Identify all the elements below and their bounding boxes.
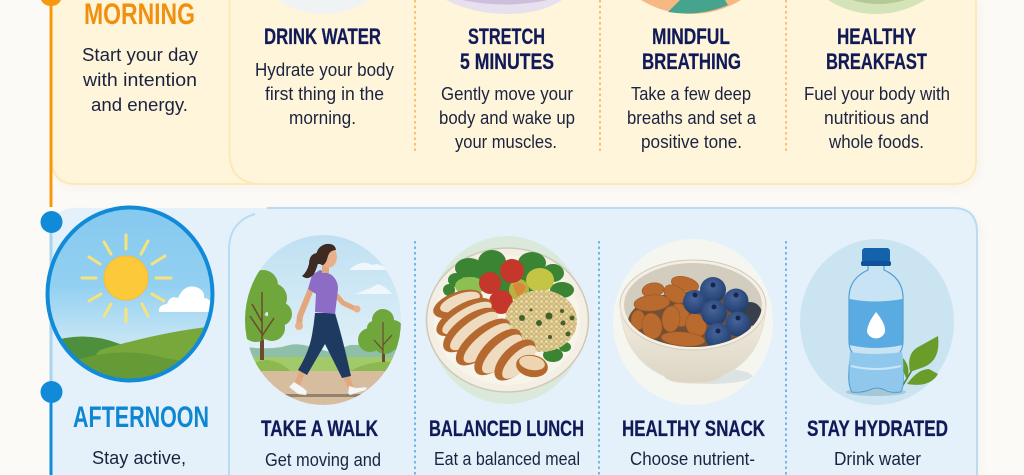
icon: afternoon sun scene [47, 207, 215, 390]
card text: drink water: Hydrate your body [255, 60, 394, 80]
card text: stretch: your muscles. [455, 132, 557, 152]
timeline [40, 0, 62, 475]
image: woman walking [238, 235, 405, 407]
image: healthy breakfast [828, 0, 925, 14]
image: mindful breathing [641, 0, 741, 14]
image: water bottle [800, 239, 954, 405]
card text: drink water [255, 24, 394, 128]
image: stretch [446, 0, 562, 14]
card text: healthy breakfast: HEALTHY [837, 24, 916, 49]
bowl front [620, 306, 766, 383]
card text: take a walk: Get moving and [265, 450, 381, 470]
title: afternoon: AFTERNOON [73, 401, 209, 434]
card text: healthy breakfast: whole foods. [828, 132, 924, 152]
card text: stay hydrated: STAY HYDRATED [807, 416, 948, 441]
card text: drink water: DRINK WATER [264, 24, 381, 49]
card text: mindful breathing [627, 24, 757, 152]
panel: afternoon [52, 208, 981, 475]
image: healthy snack bowl [613, 239, 773, 405]
card text: stay hydrated: Drink water [834, 449, 921, 469]
chicken slices [429, 284, 550, 388]
text: morning description: and energy. [91, 95, 188, 115]
card text: balanced lunch [429, 416, 584, 469]
card text: mindful breathing: positive tone. [641, 132, 742, 152]
card text: mindful breathing: Take a few deep [631, 84, 751, 104]
text: morning description [82, 45, 198, 115]
card text: stretch: Gently move your [441, 84, 573, 104]
card text: drink water: first thing in the [265, 84, 384, 104]
card text: drink water: morning. [289, 108, 356, 128]
image: balanced lunch plate [426, 236, 588, 404]
card text: healthy breakfast: Fuel your body with [804, 84, 950, 104]
card text: healthy snack: HEALTHY SNACK [622, 416, 765, 441]
woman figure [289, 244, 367, 395]
card text: healthy snack [622, 416, 765, 469]
right tree [358, 309, 404, 362]
pepper [509, 268, 554, 301]
card text: healthy breakfast: BREAKFAST [826, 49, 927, 74]
card text: stretch: STRETCH [468, 24, 545, 49]
quinoa [505, 290, 577, 352]
card text: mindful breathing: BREATHING [642, 49, 741, 74]
text: morning description: with intention [82, 70, 197, 90]
card text: healthy snack: Choose nutrient- [630, 449, 755, 469]
card text: balanced lunch: BALANCED LUNCH [429, 416, 584, 441]
card text: healthy breakfast: nutritious and [824, 108, 929, 128]
card text: stretch [439, 24, 575, 152]
card text: mindful breathing: breaths and set a [627, 108, 757, 128]
card text: balanced lunch: Eat a balanced meal [434, 449, 580, 469]
panel: morning [52, 0, 980, 188]
greens [443, 250, 574, 362]
card text: take a walk: TAKE A WALK [261, 416, 378, 441]
tomatoes [479, 259, 524, 314]
card text: stretch: 5 MINUTES [460, 49, 554, 74]
text: afternoon description: Stay active, [92, 448, 186, 468]
card text: take a walk [261, 416, 381, 470]
text: morning description: Start your day [82, 45, 198, 65]
card text: mindful breathing: MINDFUL [652, 24, 730, 49]
card text: healthy breakfast [804, 24, 950, 152]
card text: stay hydrated [807, 416, 948, 469]
left tree [245, 270, 292, 360]
leaf sprig [900, 336, 938, 390]
card text: stretch: body and wake up [439, 108, 575, 128]
image: drink water [279, 0, 368, 14]
